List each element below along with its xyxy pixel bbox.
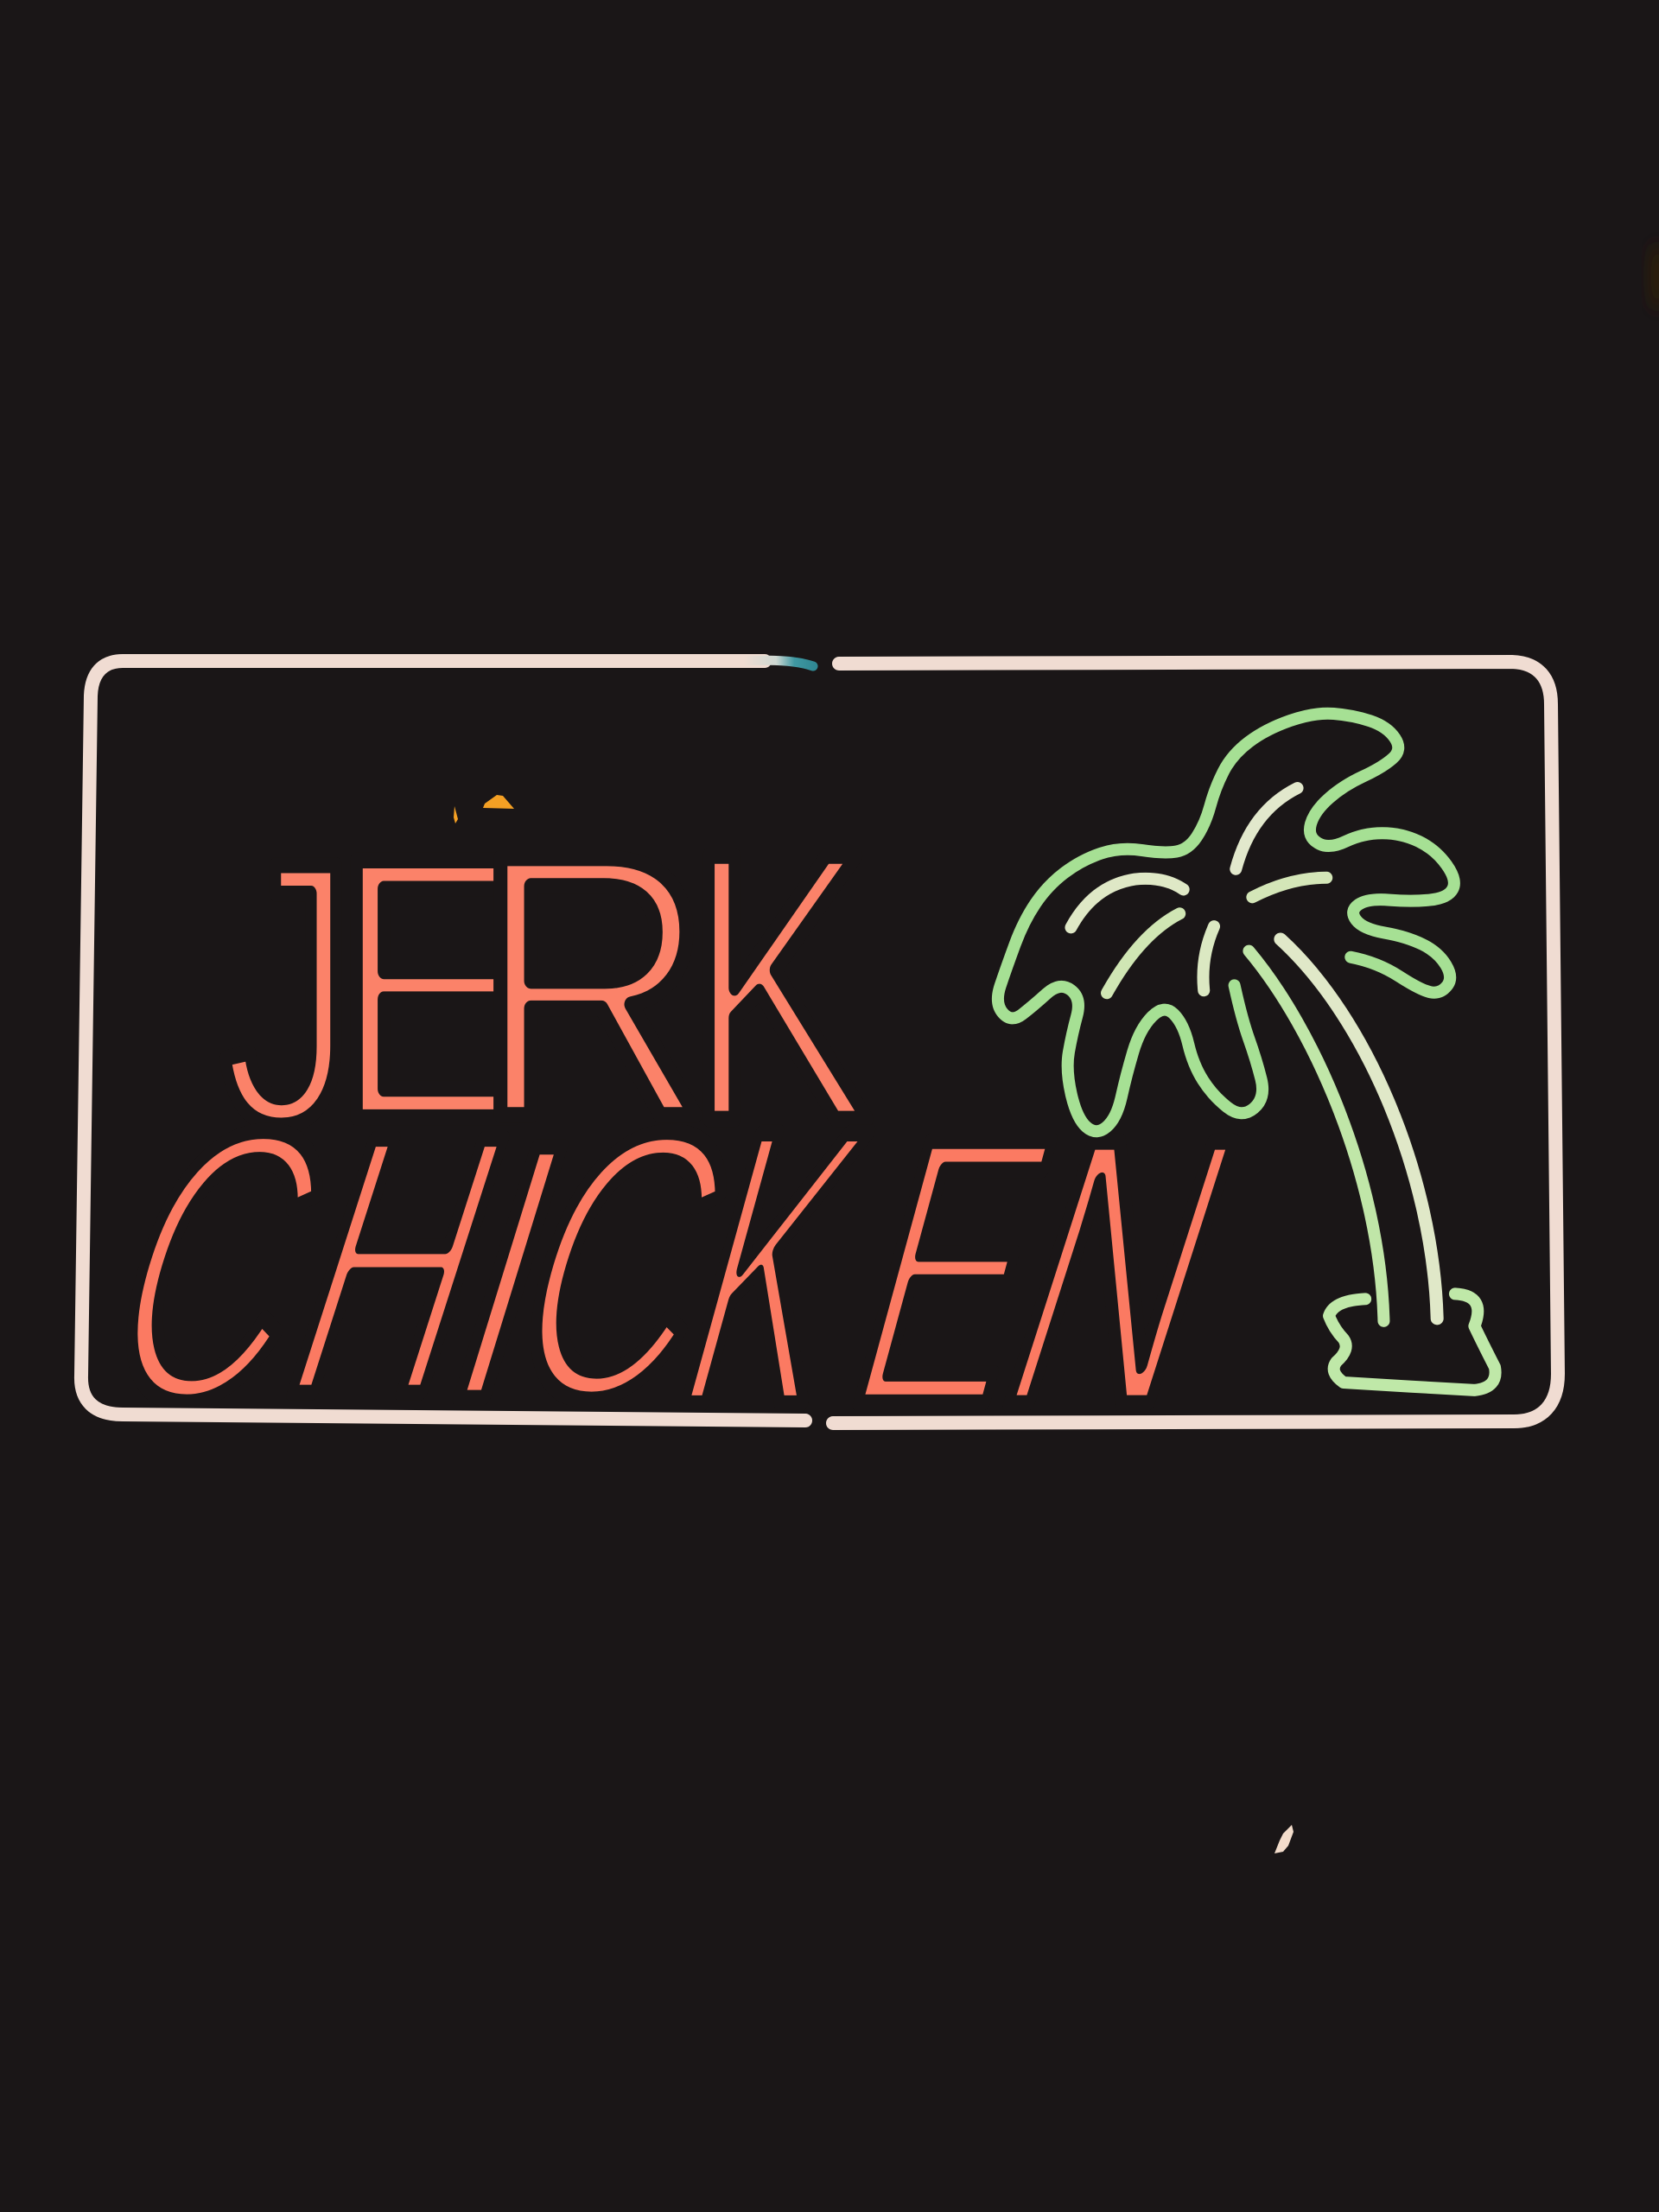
palm canopy outline (998, 714, 1454, 1131)
inner frond: top (1236, 788, 1298, 869)
inner frond: upper left (1071, 879, 1184, 927)
inner frond: centre (1203, 926, 1214, 990)
trunk: left line (1249, 951, 1383, 1321)
frame: left section (81, 661, 805, 1421)
letter C: C (67, 1052, 371, 1481)
letter E second: E (817, 1058, 1090, 1484)
word: CHICKEN (67, 1049, 1281, 1488)
heading: JERK CHICKEN neon lettering (67, 772, 1281, 1488)
letter K second: K (645, 1049, 904, 1488)
shard: sliver (454, 806, 458, 823)
inner frond: lower left (1107, 913, 1179, 993)
orange light shards (454, 795, 514, 823)
white neon frame (81, 660, 1558, 1423)
letter R: R (474, 779, 710, 1195)
faint orange reflection at right edge (1652, 242, 1659, 311)
letter K: K (686, 772, 870, 1200)
white chip on wall (1274, 1825, 1294, 1853)
icon: neon palm tree (998, 714, 1496, 1390)
letter H: H (248, 1060, 549, 1471)
letter E: E (333, 780, 528, 1197)
letter C second: C (473, 1054, 774, 1477)
frame: right section (833, 662, 1558, 1423)
letter N: N (963, 1059, 1281, 1484)
letter J: J (221, 785, 356, 1201)
word: JERK (221, 772, 870, 1201)
letter I: I (410, 1068, 612, 1475)
palm base (1329, 1294, 1496, 1390)
frame: teal faded tip (743, 660, 813, 666)
shard: triangle (483, 795, 514, 809)
inner frond: right (1252, 878, 1326, 897)
trunk: right line (1281, 939, 1437, 1319)
